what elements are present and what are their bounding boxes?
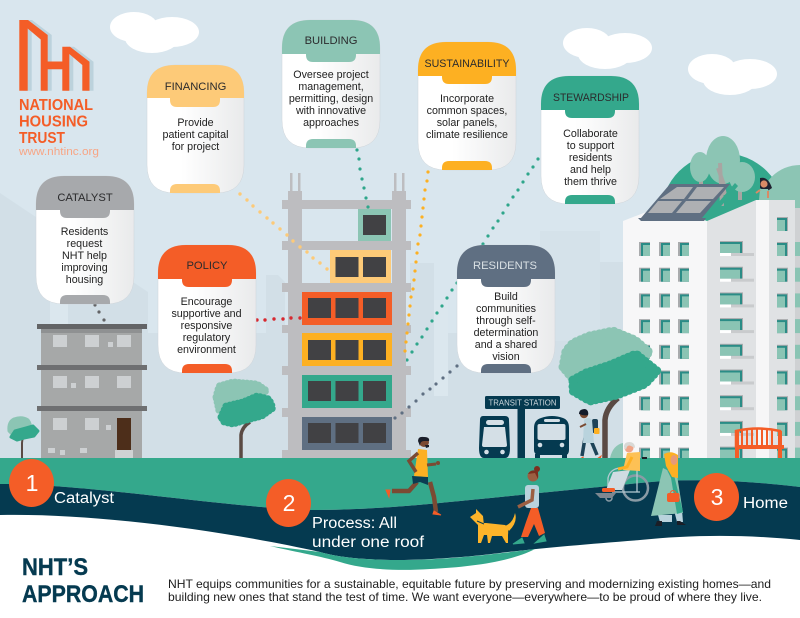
card: stewardship: them thrive bbox=[564, 176, 617, 188]
floor: stewardship green bbox=[302, 375, 392, 408]
dotted connector: policy bbox=[255, 316, 302, 322]
woman walking dog bbox=[513, 466, 546, 544]
transit station bbox=[479, 396, 569, 458]
card: financing bbox=[147, 65, 244, 193]
card: residents: and a shared bbox=[475, 339, 537, 351]
step 1: catalyst: Catalyst bbox=[54, 490, 115, 507]
dotted connector: building bbox=[355, 148, 370, 209]
step 1: catalyst bbox=[9, 459, 115, 507]
card: sustainability bbox=[418, 42, 516, 170]
card: building: approaches bbox=[303, 117, 359, 129]
card: building: BUILDING bbox=[305, 35, 357, 47]
step 3: home: Home bbox=[743, 495, 788, 512]
card: policy: regulatory bbox=[183, 332, 231, 344]
ground bbox=[0, 458, 800, 570]
card: policy: POLICY bbox=[186, 260, 228, 272]
card: catalyst: request bbox=[67, 238, 102, 250]
card: sustainability: climate resilience bbox=[426, 129, 508, 141]
card: sustainability: Incorporate bbox=[440, 93, 494, 105]
dotted connector: sustainability bbox=[403, 170, 430, 353]
card: financing: patient capital bbox=[163, 129, 228, 141]
card: catalyst: housing bbox=[66, 274, 103, 286]
card: sustainability: SUSTAINABILITY bbox=[424, 58, 510, 70]
card: financing: FINANCING bbox=[165, 81, 226, 93]
card: stewardship: residents bbox=[569, 152, 612, 164]
card: financing: for project bbox=[172, 141, 219, 153]
floor: sustainability amber bbox=[302, 333, 392, 366]
card: sustainability: common spaces, bbox=[427, 105, 507, 117]
dotted connector: residents bbox=[393, 364, 459, 420]
person with phone bbox=[577, 409, 601, 461]
big tree bbox=[563, 331, 657, 458]
logo: National Housing Trust: TRUST bbox=[19, 130, 65, 147]
card: policy: environment bbox=[177, 344, 236, 356]
step 1: catalyst: 1 bbox=[26, 470, 38, 496]
concrete frame of central building bbox=[282, 173, 411, 458]
card: stewardship: STEWARDSHIP bbox=[553, 92, 629, 104]
floor: financing yellow bbox=[330, 250, 391, 283]
step 2: process bbox=[266, 479, 425, 551]
white footer background bbox=[0, 490, 800, 618]
card: policy: responsive bbox=[181, 320, 232, 332]
floor: residents slate bbox=[302, 417, 392, 450]
small tree bbox=[9, 418, 38, 458]
transit station: TRANSIT STATION bbox=[488, 398, 557, 408]
title: NHT's Approach: NHT’S bbox=[22, 554, 88, 581]
clouds bbox=[110, 12, 777, 95]
card: policy: Encourage bbox=[181, 296, 232, 308]
card: catalyst: NHT help bbox=[62, 250, 107, 262]
distant city silhouettes bbox=[0, 193, 800, 458]
description text: NHT equips communities for a sustainable, equitable future by preserving and modernizing existing homes—and bbox=[168, 578, 771, 591]
woman with hijab bbox=[651, 452, 686, 526]
logo: National Housing Trust: www.nhtinc.org bbox=[18, 146, 99, 158]
card: catalyst: Residents bbox=[61, 226, 108, 238]
dog bbox=[470, 509, 516, 543]
card: stewardship: Collaborate bbox=[563, 128, 618, 140]
card: building: with innovative bbox=[295, 105, 366, 117]
description text: building new ones that stand the test of time. We want everyone—everywhere—to be proud of where they live. bbox=[168, 591, 762, 604]
card: sustainability: solar panels, bbox=[437, 117, 497, 129]
solar panels bbox=[638, 183, 738, 221]
card: residents: vision bbox=[492, 351, 520, 363]
card: residents: through self- bbox=[476, 315, 536, 327]
description text bbox=[168, 578, 771, 604]
step 3: home: 3 bbox=[711, 484, 723, 510]
card: residents: Build bbox=[494, 291, 518, 303]
card: residents: communities bbox=[476, 303, 536, 315]
bench bbox=[735, 428, 784, 458]
card: building bbox=[282, 20, 380, 148]
tower: home apartment building bbox=[623, 200, 800, 462]
person on roof bbox=[756, 178, 772, 200]
card: catalyst: CATALYST bbox=[57, 192, 113, 204]
floor: building teal bbox=[358, 209, 391, 241]
step 3: home bbox=[694, 473, 788, 521]
card: stewardship: to support bbox=[567, 140, 614, 152]
dotted connector: stewardship bbox=[405, 157, 540, 362]
old apartment building bbox=[37, 324, 147, 458]
card: residents: determination bbox=[474, 327, 538, 339]
card: catalyst: improving bbox=[61, 262, 108, 274]
person in wheelchair bbox=[595, 442, 648, 501]
card: building: Oversee project bbox=[293, 69, 369, 81]
card: building: management, bbox=[298, 81, 364, 93]
card: building: permitting, design bbox=[289, 93, 373, 105]
card: policy: supportive and bbox=[171, 308, 242, 320]
title: NHT's Approach bbox=[22, 554, 144, 608]
card: stewardship: and help bbox=[570, 164, 611, 176]
logo: National Housing Trust: NATIONAL bbox=[19, 97, 93, 114]
card: catalyst bbox=[36, 176, 134, 304]
step 2: process: under one roof bbox=[312, 534, 425, 551]
dotted connector: financing bbox=[238, 192, 329, 271]
bush at tower base bbox=[610, 443, 623, 458]
tower windows bbox=[639, 217, 800, 462]
card: financing: Provide bbox=[177, 117, 214, 129]
floor: policy orange bbox=[302, 292, 392, 325]
card: residents: RESIDENTS bbox=[473, 260, 537, 272]
logo: National Housing Trust: HOUSING bbox=[19, 114, 88, 130]
dotted connector: catalyst bbox=[93, 303, 111, 330]
runner bbox=[386, 437, 441, 515]
medium tree bbox=[216, 382, 273, 459]
card: policy bbox=[158, 245, 256, 373]
train bbox=[479, 416, 510, 458]
card: stewardship bbox=[541, 76, 639, 204]
logo: National Housing Trust bbox=[18, 20, 99, 158]
card: residents bbox=[457, 245, 555, 373]
title: NHT's Approach: APPROACH bbox=[22, 581, 144, 608]
background trees behind tower roof bbox=[661, 136, 800, 277]
bus bbox=[534, 416, 569, 458]
step 2: process: 2 bbox=[283, 490, 295, 516]
step 2: process: Process: All bbox=[312, 515, 397, 532]
